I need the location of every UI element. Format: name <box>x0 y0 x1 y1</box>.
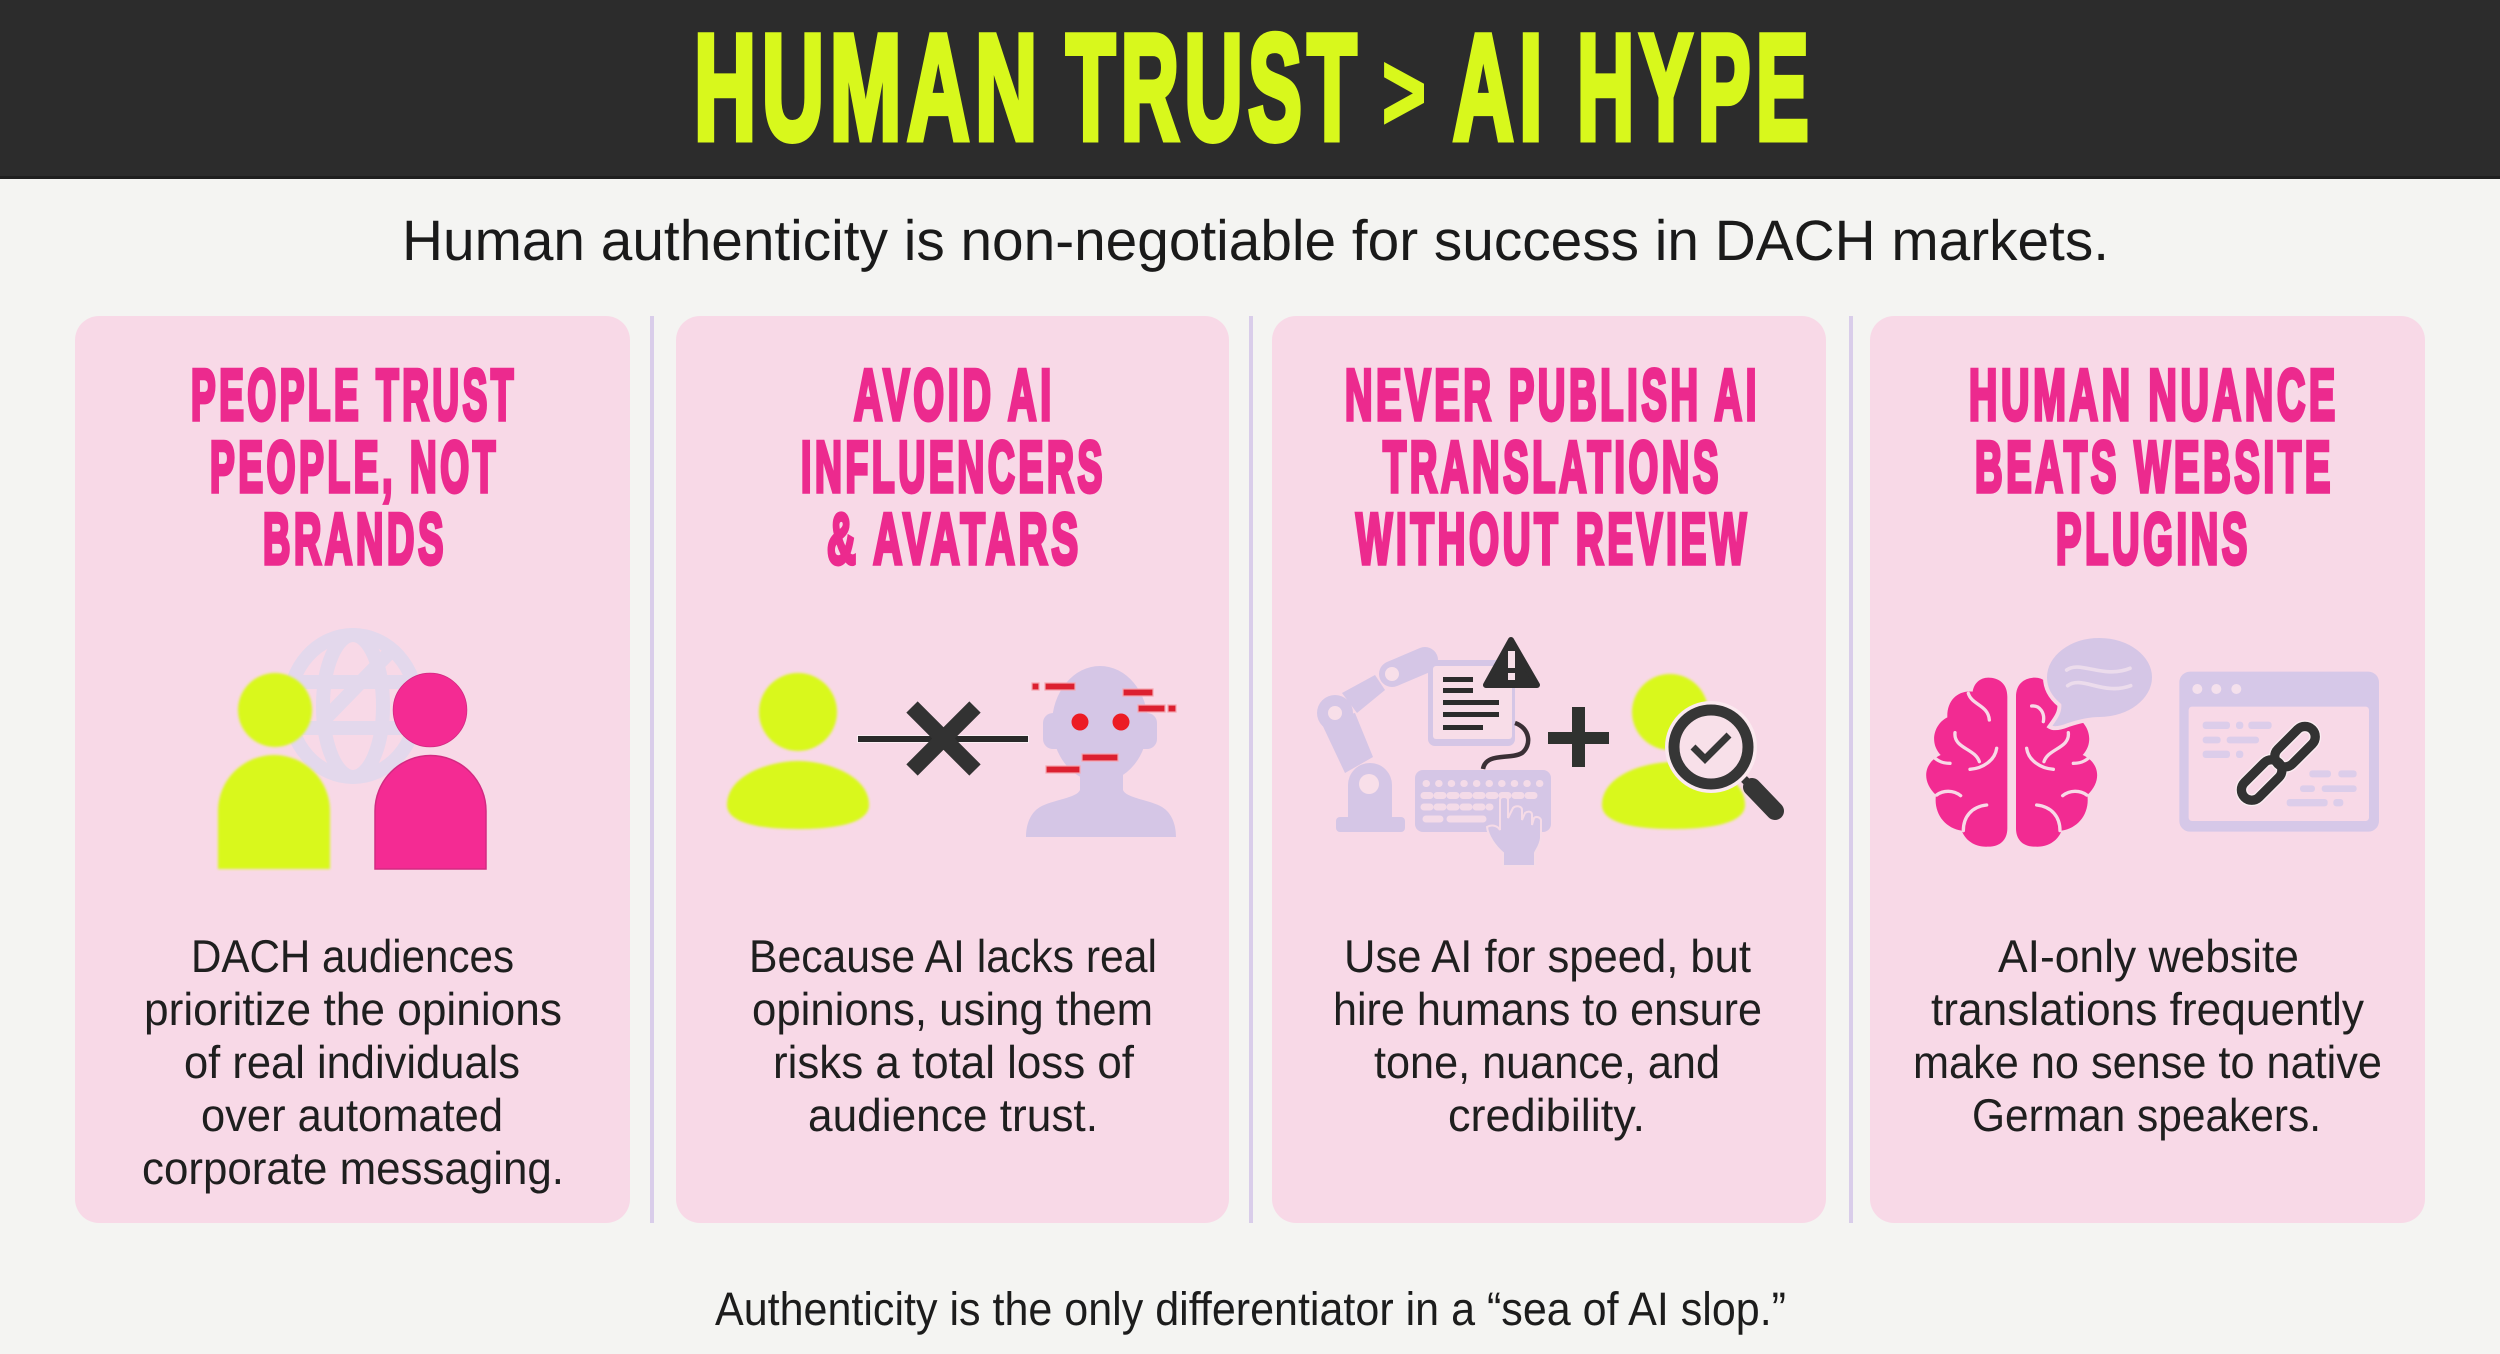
cable <box>1483 723 1528 769</box>
body text: avoid AI influencers: audience trust. <box>808 1089 1098 1141</box>
body text: avoid AI influencers: opinions, using them <box>752 983 1153 1035</box>
heading: avoid AI influencers: & AVATARS <box>827 500 1082 580</box>
heading: human nuance beats plugins: PLUGINS <box>2056 500 2251 580</box>
title: AI <box>1453 3 1548 171</box>
warning triangle <box>1486 640 1537 685</box>
body text: human nuance beats plugins <box>1913 930 2382 1141</box>
body text: people trust people: corporate messaging. <box>142 1142 564 1194</box>
heading: avoid AI influencers <box>801 356 1106 580</box>
body text: people trust people: DACH audiences <box>191 930 514 982</box>
title: HYPE <box>1577 3 1814 171</box>
panel: people trust people <box>75 316 630 1223</box>
AI avatar <box>1026 666 1176 837</box>
body text: never publish AI translations: tone, nuance, and <box>1374 1036 1720 1088</box>
title: > <box>1382 31 1426 152</box>
heading: people trust people: PEOPLE, NOT <box>210 428 499 508</box>
speech bubble <box>2045 636 2154 728</box>
body text: people trust people: of real individuals <box>184 1036 520 1088</box>
heading: never publish AI translations: NEVER PUBLISH AI <box>1345 356 1760 436</box>
heading: people trust people: PEOPLE TRUST <box>191 356 517 436</box>
magnifying glass with check <box>1665 701 1775 811</box>
lime person <box>727 673 869 829</box>
icon: two people and globe <box>218 635 486 869</box>
panel: avoid AI influencers <box>676 316 1229 1223</box>
body text: people trust people <box>142 930 564 1194</box>
keyboard with hand <box>1415 770 1551 866</box>
heading: human nuance beats plugins <box>1969 356 2339 580</box>
title: HUMAN <box>694 3 1043 171</box>
body text: never publish AI translations <box>1333 930 1762 1141</box>
icon: person not equal to AI avatar <box>727 666 1176 837</box>
header band with title <box>0 0 2500 179</box>
chain link icon <box>2237 722 2320 805</box>
body text: avoid AI influencers: Because AI lacks real <box>749 930 1157 982</box>
heading: people trust people: BRANDS <box>263 500 447 580</box>
heading: avoid AI influencers: INFLUENCERS <box>801 428 1106 508</box>
body text: never publish AI translations: Use AI for speed, but <box>1344 930 1751 982</box>
title: TRUST <box>1066 3 1362 171</box>
heading: never publish AI translations: WITHOUT REVIEW <box>1356 500 1750 580</box>
crossed line <box>857 707 1029 770</box>
robot arm <box>1317 660 1425 832</box>
panel: human nuance beats plugins <box>1870 316 2425 1223</box>
lime person <box>1602 674 1745 829</box>
brain <box>1926 678 2097 847</box>
body text: human nuance beats plugins: AI-only website <box>1998 930 2299 982</box>
browser window <box>2179 672 2379 832</box>
icon: robot arm plus human review <box>1317 640 1775 866</box>
footer statement: Authenticity is the only differentiator in a “sea of AI slop.” <box>715 1282 1786 1335</box>
body text: human nuance beats plugins: German speakers. <box>1972 1089 2321 1141</box>
icon: brain with speech bubble and browser link <box>1926 636 2379 847</box>
body text: avoid AI influencers <box>749 930 1157 1141</box>
heading: never publish AI translations: TRANSLATIONS <box>1383 428 1722 508</box>
heading: people trust people <box>191 356 517 580</box>
body text: avoid AI influencers: risks a total loss of <box>773 1036 1134 1088</box>
plus sign <box>1548 707 1609 767</box>
document <box>1428 660 1515 746</box>
subtitle: Human authenticity is non-negotiable for success in DACH markets. <box>402 209 2109 273</box>
title <box>694 3 1814 171</box>
heading: avoid AI influencers: AVOID AI <box>854 356 1055 436</box>
body text: people trust people: prioritize the opinions <box>144 983 562 1035</box>
body text: never publish AI translations: credibility. <box>1448 1089 1645 1141</box>
body text: human nuance beats plugins: translations frequently <box>1931 983 2364 1035</box>
panel: never publish AI translations <box>1272 316 1826 1223</box>
body text: human nuance beats plugins: make no sense to native <box>1913 1036 2382 1088</box>
body text: people trust people: over automated <box>201 1089 503 1141</box>
body text: never publish AI translations: hire humans to ensure <box>1333 983 1762 1035</box>
heading: never publish AI translations <box>1345 356 1760 580</box>
